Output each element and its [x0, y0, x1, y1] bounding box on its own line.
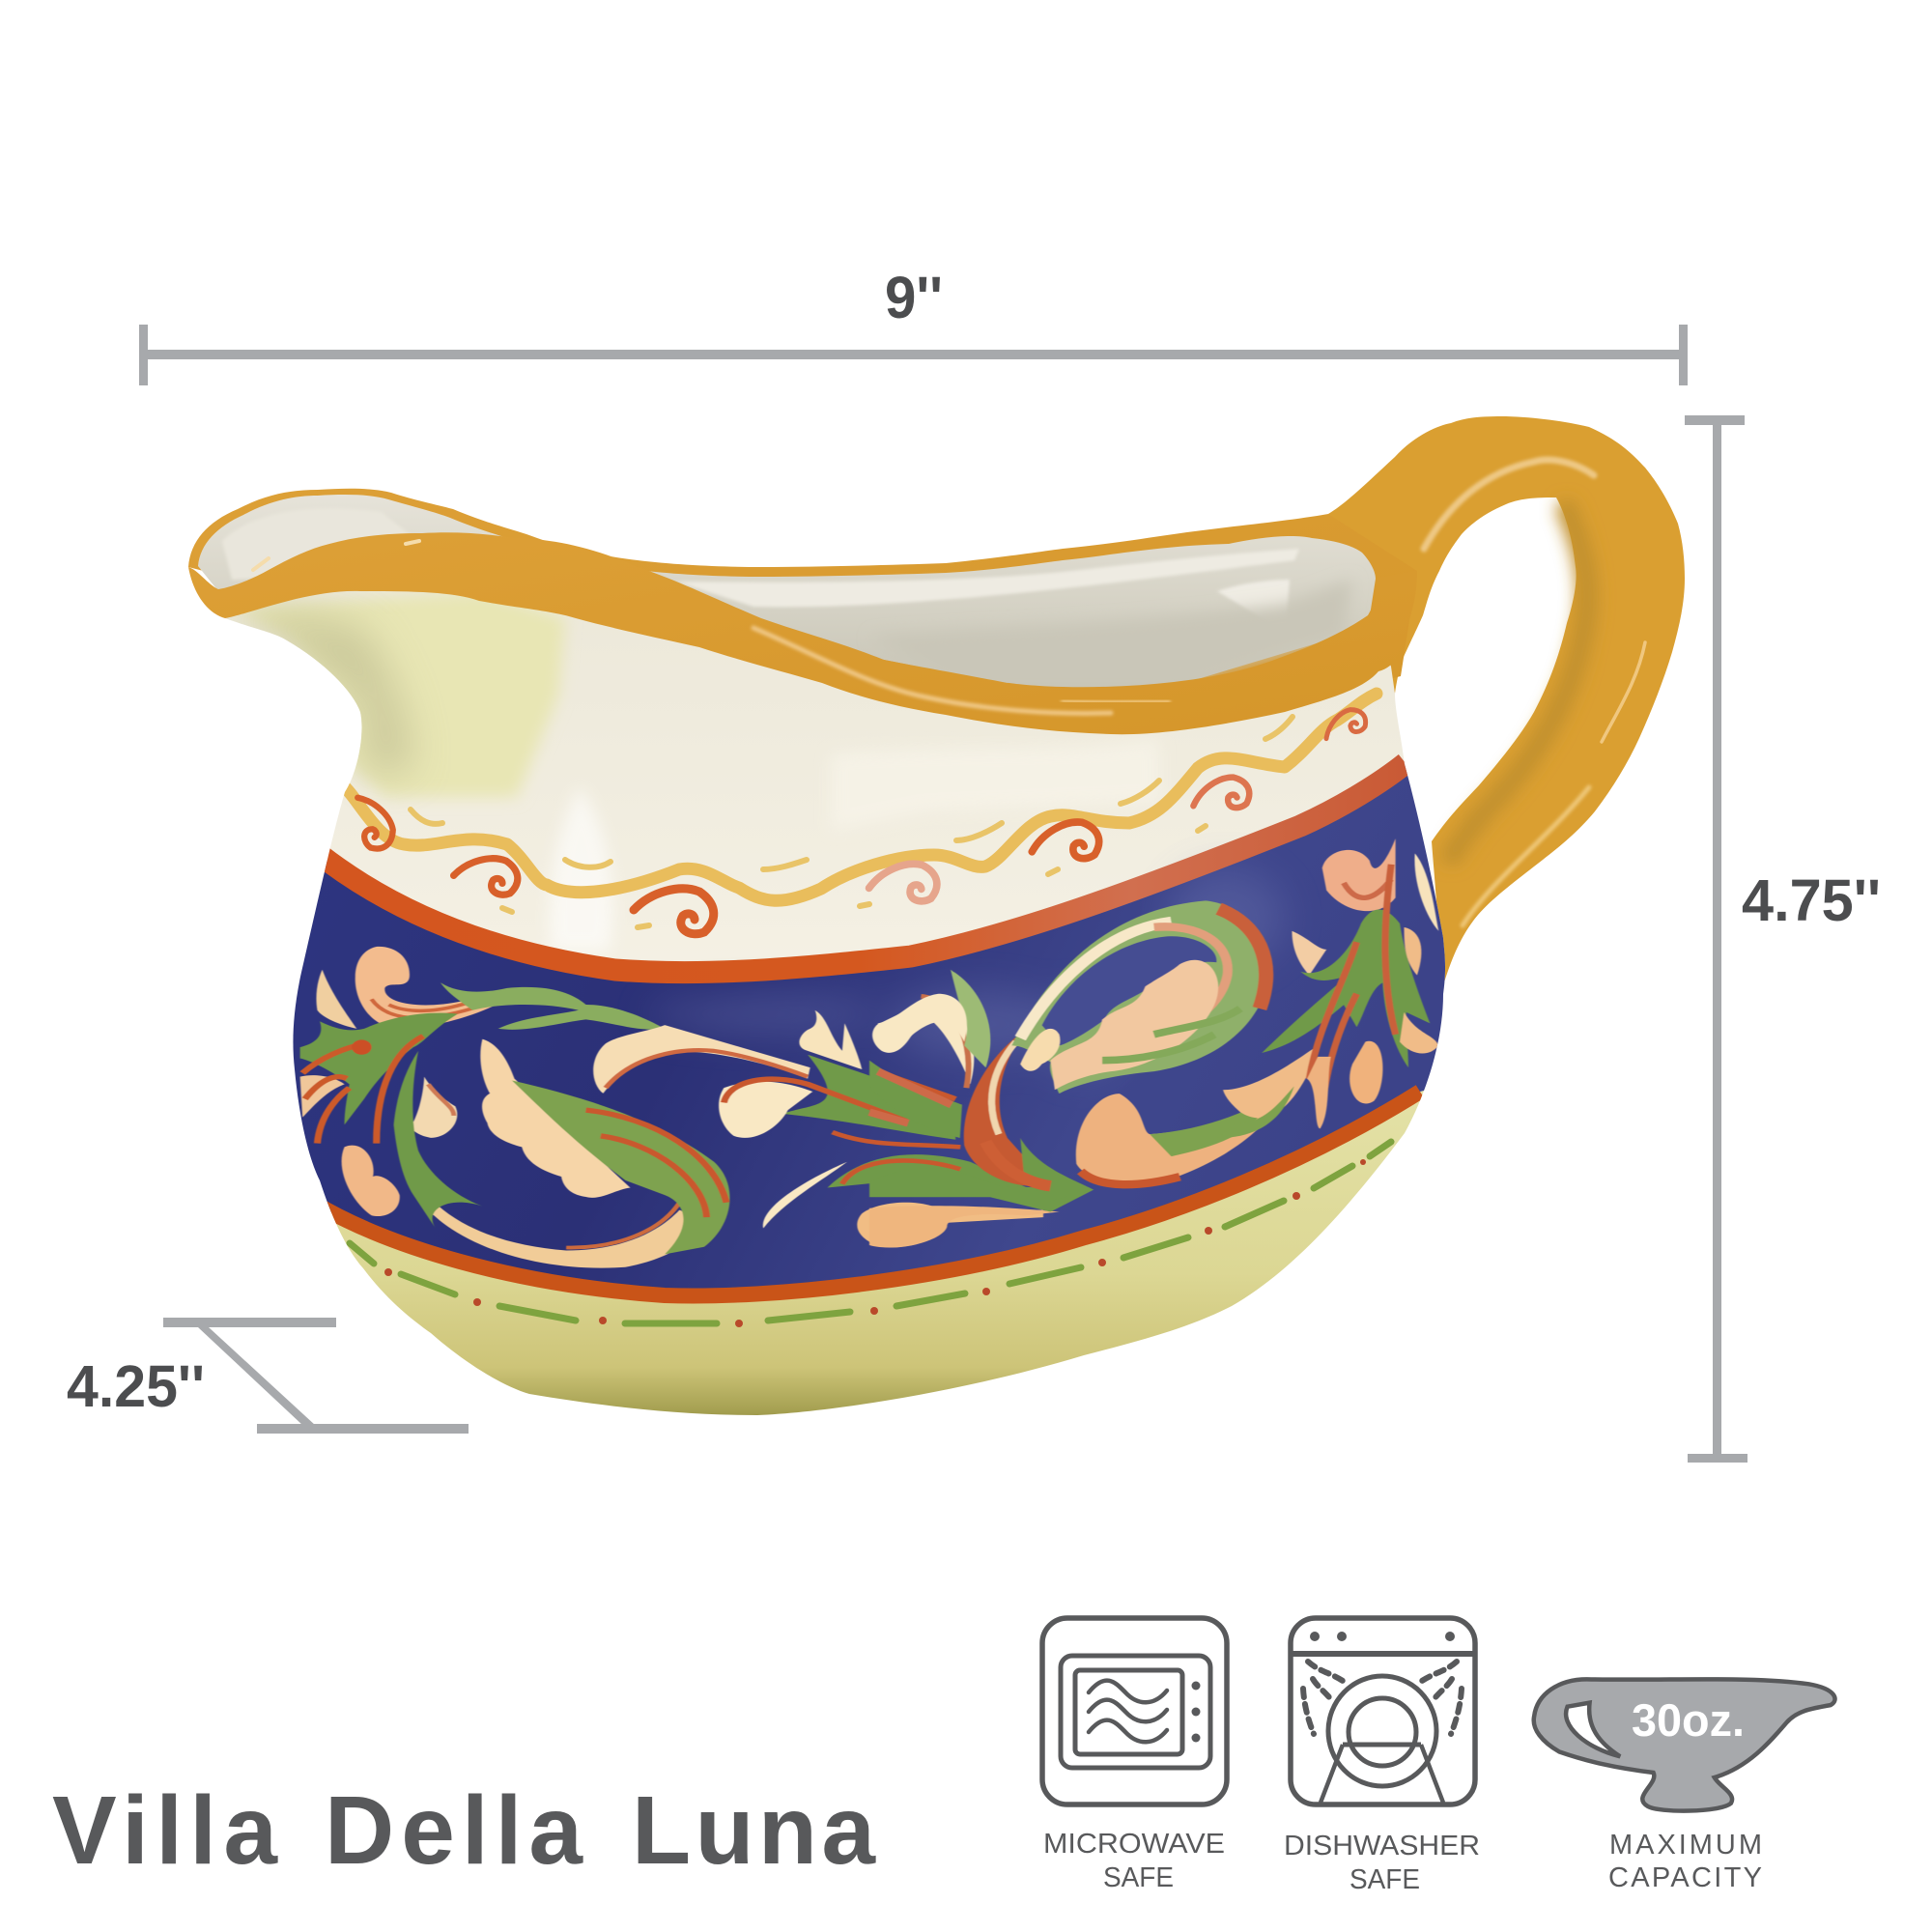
pitcher body: [226, 591, 1445, 1415]
label: maximum capacity: CAPACITY: [1608, 1862, 1762, 1893]
dimension: height 4.75 inches: [1685, 415, 1881, 1463]
acanthus scroll centre: [593, 970, 1043, 1247]
dimension: depth 4.25 inches: [67, 1318, 469, 1434]
acanthus scroll right: [869, 900, 1284, 1247]
label: microwave safe: SAFE: [1103, 1862, 1174, 1893]
label: maximum capacity: MAXIMUM: [1609, 1830, 1762, 1861]
wavy yellow line: [342, 694, 1377, 900]
label: microwave safe: MICROWAVE: [1043, 1829, 1225, 1860]
label: dishwasher safe: DISHWASHER: [1284, 1831, 1480, 1861]
label: dishwasher safe: SAFE: [1350, 1864, 1420, 1895]
cobalt decorative band: [270, 744, 1459, 1296]
product name: Villa: [52, 1776, 278, 1885]
band mottling: [667, 871, 1281, 1061]
front rim: [188, 532, 1417, 734]
lower red stripe: [314, 1092, 1420, 1296]
label: dishwasher safe: [1284, 1831, 1480, 1895]
icon: gravy boat 30oz capacity: [1534, 1679, 1835, 1811]
handle: [1328, 416, 1685, 985]
icon: gravy boat 30oz capacity: 30oz.: [1632, 1694, 1745, 1746]
orange scrolls: [344, 704, 1370, 934]
icon: microwave safe: [1042, 1618, 1227, 1804]
dimension: width 9 inches: [139, 265, 1688, 385]
back rim and interior: [188, 489, 1417, 753]
acanthus sprig right edge: [1219, 838, 1438, 1138]
icon: dishwasher safe: [1291, 1618, 1475, 1804]
small yellow ticks: [411, 717, 1293, 927]
label: maximum capacity: [1608, 1830, 1762, 1893]
upper red stripe: [314, 763, 1406, 973]
green dashes and red dots: [350, 1142, 1391, 1327]
lower glaze band: [331, 1091, 1424, 1415]
dimension: width 9 inches: 9'': [885, 265, 943, 330]
spout shading: [227, 591, 1159, 952]
product name: Della: [325, 1776, 583, 1885]
product name: Luna: [632, 1776, 876, 1885]
gravy boat illustration: [174, 416, 1685, 1430]
dimension: depth 4.25 inches: 4.25'': [67, 1353, 205, 1419]
dimension: height 4.75 inches: 4.75'': [1742, 867, 1881, 933]
product name: [52, 1776, 876, 1885]
acanthus scroll left: [300, 947, 730, 1268]
cream upper body: [226, 591, 1445, 981]
label: microwave safe: [1043, 1829, 1225, 1893]
